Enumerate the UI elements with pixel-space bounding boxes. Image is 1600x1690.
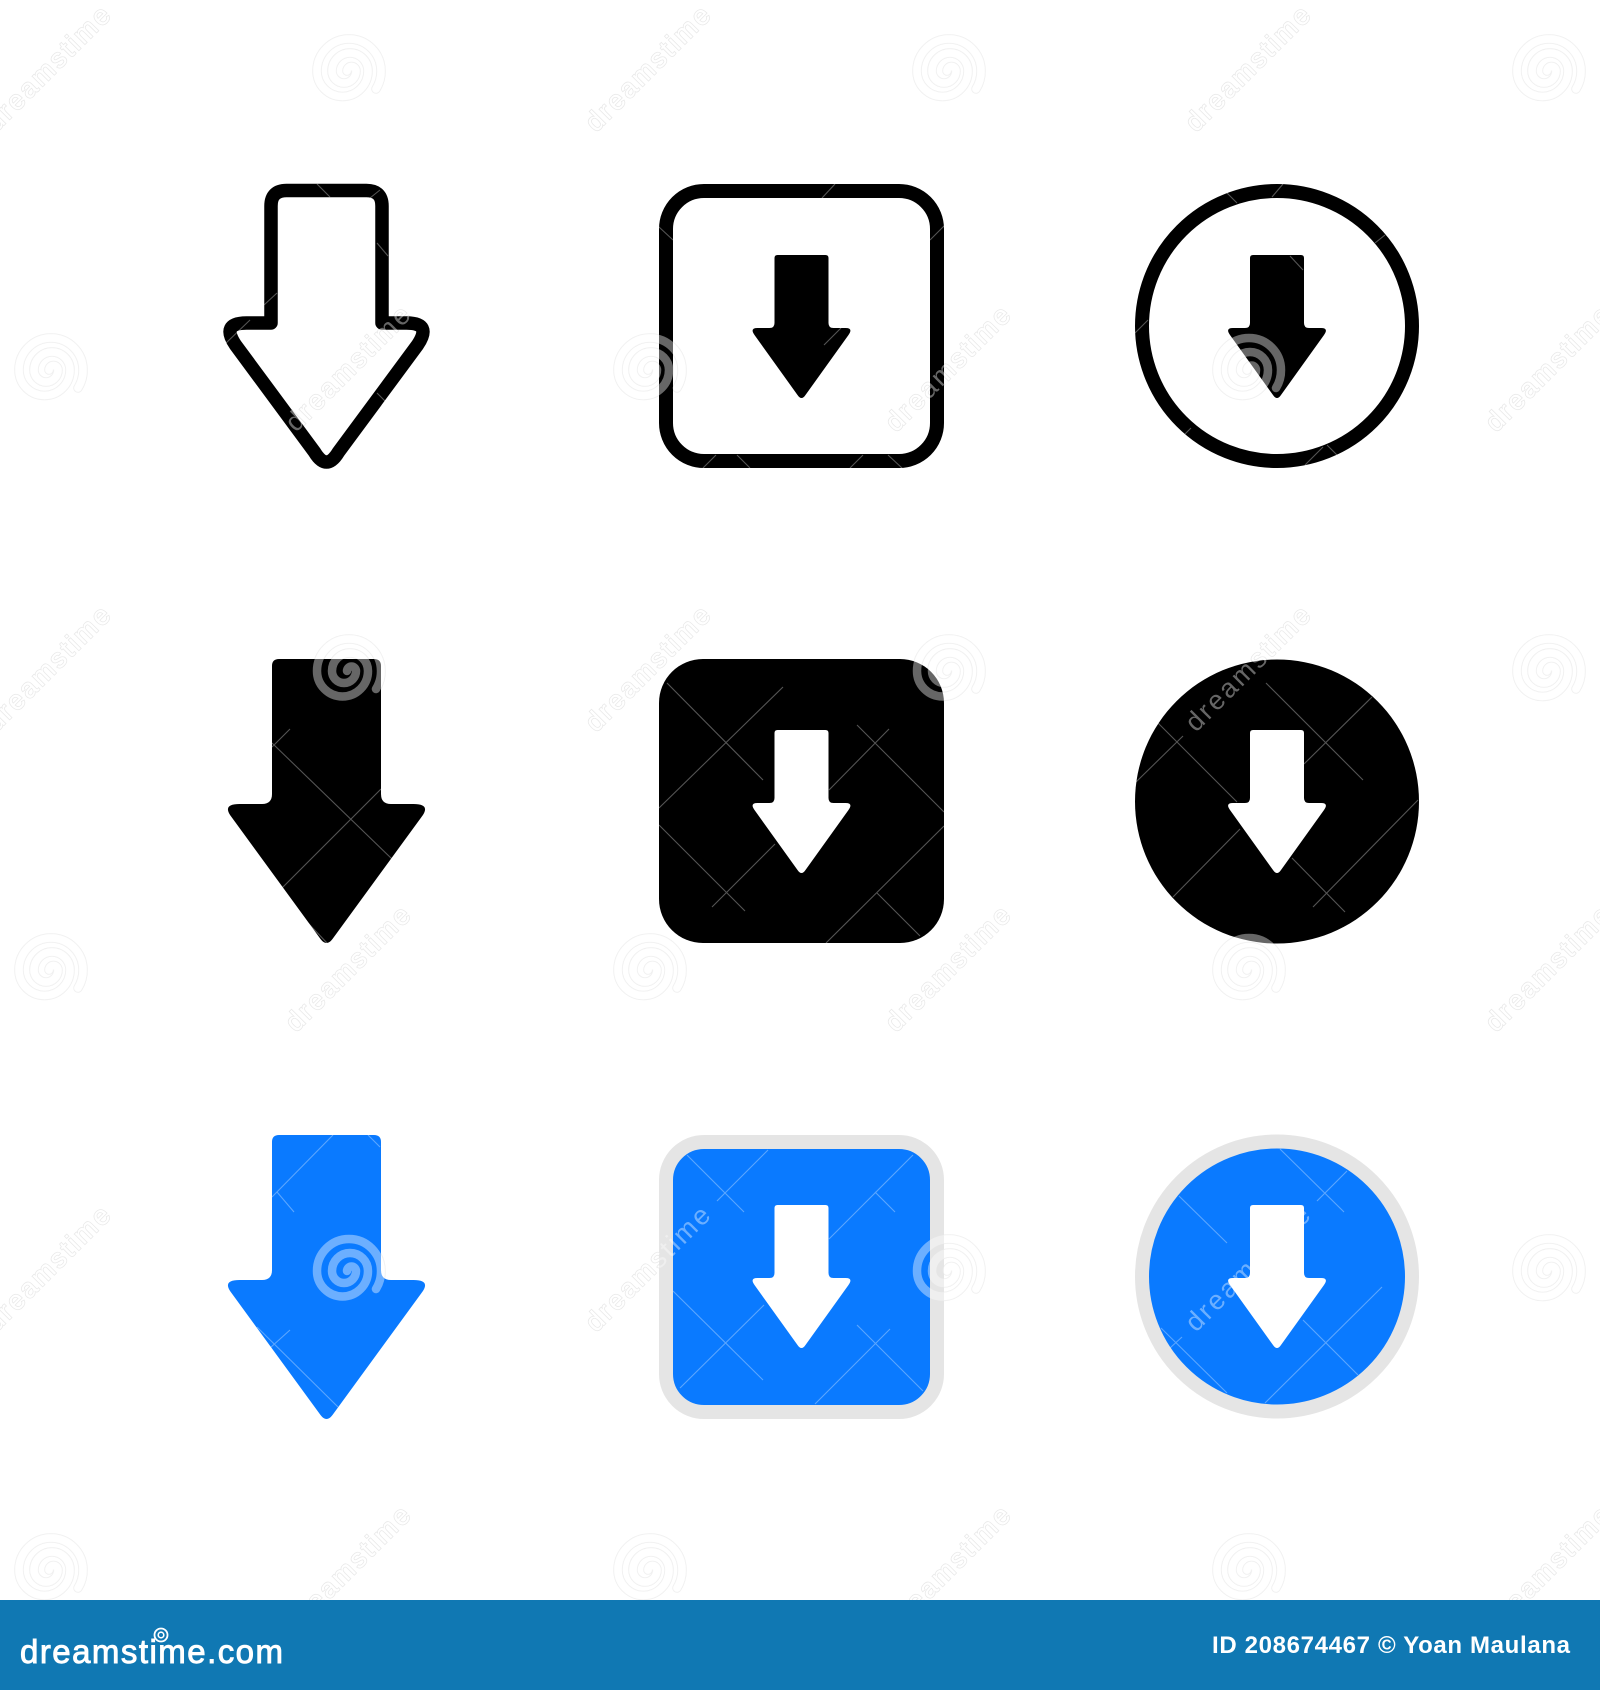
watermark: faint outlines on white: dreamstime — [279, 300, 416, 437]
watermark: overlay on dark and blue shapes: dreamstime — [879, 300, 1016, 437]
footer credit: ID 208674467 © Yoan Maulana — [1212, 1632, 1571, 1659]
watermark: faint outlines on white: dreamstime — [1179, 1200, 1316, 1337]
watermark: faint outlines on white: dreamstime — [279, 1500, 416, 1637]
watermark: faint outlines on white: dreamstime — [579, 1200, 716, 1337]
watermark: overlay on dark and blue shapes: dreamstime — [1179, 1200, 1316, 1337]
icon: blue circle with grey border and white arrow — [1142, 1142, 1412, 1412]
icon: solid blue arrow — [228, 1135, 425, 1419]
icon: black circle with white arrow — [1135, 660, 1419, 944]
watermark: faint outlines on white: dreamstime — [879, 900, 1016, 1037]
icon: outline arrow — [230, 190, 423, 462]
watermark: faint outlines on white: dreamstime — [579, 0, 716, 137]
watermark: overlay on dark and blue shapes: dreamstime — [279, 900, 416, 1037]
icon: outline circle with arrow — [1142, 191, 1412, 461]
watermark: overlay on dark and blue shapes: dreamstime — [879, 900, 1016, 1037]
watermark: faint outlines on white: dreamstime — [1179, 0, 1316, 137]
icon: black square with white arrow — [659, 659, 944, 943]
icon: outline square with arrow — [666, 191, 937, 461]
watermark: overlay on dark and blue shapes: dreamstime — [579, 1200, 716, 1337]
footer bar — [0, 1600, 1600, 1690]
watermark: faint outlines on white: dreamstime — [879, 300, 1016, 437]
watermark: overlay on dark and blue shapes: dreamstime — [279, 300, 416, 437]
watermark: faint outlines on white: dreamstime — [1179, 600, 1316, 737]
footer logo spiral — [154, 1628, 168, 1642]
footer logo text: dreamstime.com — [20, 1633, 283, 1670]
watermark: faint outlines on white: dreamstime — [279, 900, 416, 1037]
icon: solid black arrow — [228, 659, 425, 943]
watermark: overlay on dark and blue shapes: dreamstime — [1179, 600, 1316, 737]
watermark: overlay on dark and blue shapes: dreamstime — [579, 600, 716, 737]
watermark: faint outlines on white: dreamstime — [879, 1500, 1016, 1637]
icon: blue square with grey border and white arrow — [666, 1142, 937, 1412]
watermark: faint outlines on white: dreamstime — [579, 600, 716, 737]
